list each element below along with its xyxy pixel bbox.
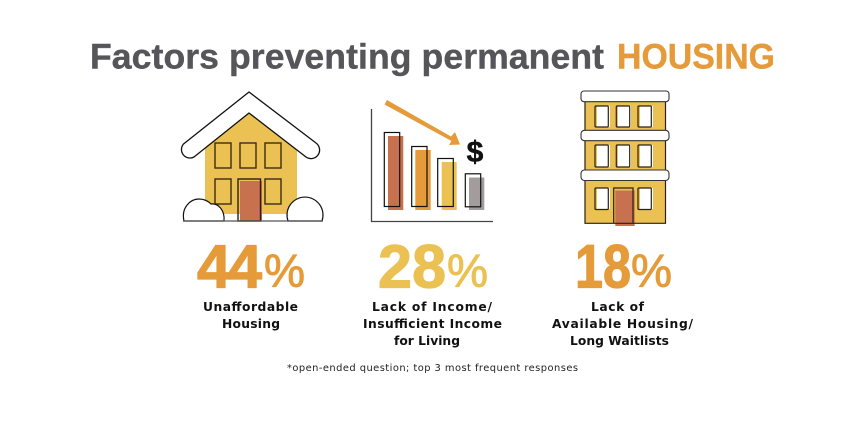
stat: 18% — [575, 232, 672, 300]
stat: 28%: 28 — [378, 232, 446, 300]
label: unaffordable housing: Housing — [222, 317, 280, 331]
stat: 44% — [197, 232, 305, 300]
stat: 18%: % — [631, 244, 672, 296]
label: lack of income: for Living — [394, 334, 460, 348]
icon: falling bar chart with dollar sign — [372, 100, 493, 222]
label: unaffordable housing: Unaffordable — [203, 300, 298, 314]
stat: 18%: 18 — [575, 232, 631, 300]
label: lack of available housing: Lack of — [591, 300, 645, 314]
icon: apartment building — [581, 91, 669, 226]
label: lack of available housing — [552, 300, 694, 348]
icon: house — [181, 92, 323, 221]
label: lack of income: Insufficient Income — [363, 317, 502, 331]
stat: 28% — [378, 232, 488, 300]
title: HOUSING — [617, 36, 775, 76]
label: lack of income — [363, 300, 502, 348]
stat: 44%: 44 — [197, 232, 262, 300]
stat: 28%: % — [447, 244, 488, 296]
label: lack of available housing: Long Waitlists — [570, 334, 669, 348]
label: unaffordable housing — [203, 300, 298, 331]
title: Factors preventing permanent — [90, 36, 604, 76]
footnote: *open-ended question; top 3 most frequent responses — [287, 363, 578, 374]
label: lack of available housing: Available Housing/ — [552, 317, 694, 331]
stat: 44%: % — [264, 244, 305, 296]
icon: falling bar chart with dollar sign: $ — [467, 136, 484, 169]
label: lack of income: Lack of Income/ — [372, 300, 492, 314]
